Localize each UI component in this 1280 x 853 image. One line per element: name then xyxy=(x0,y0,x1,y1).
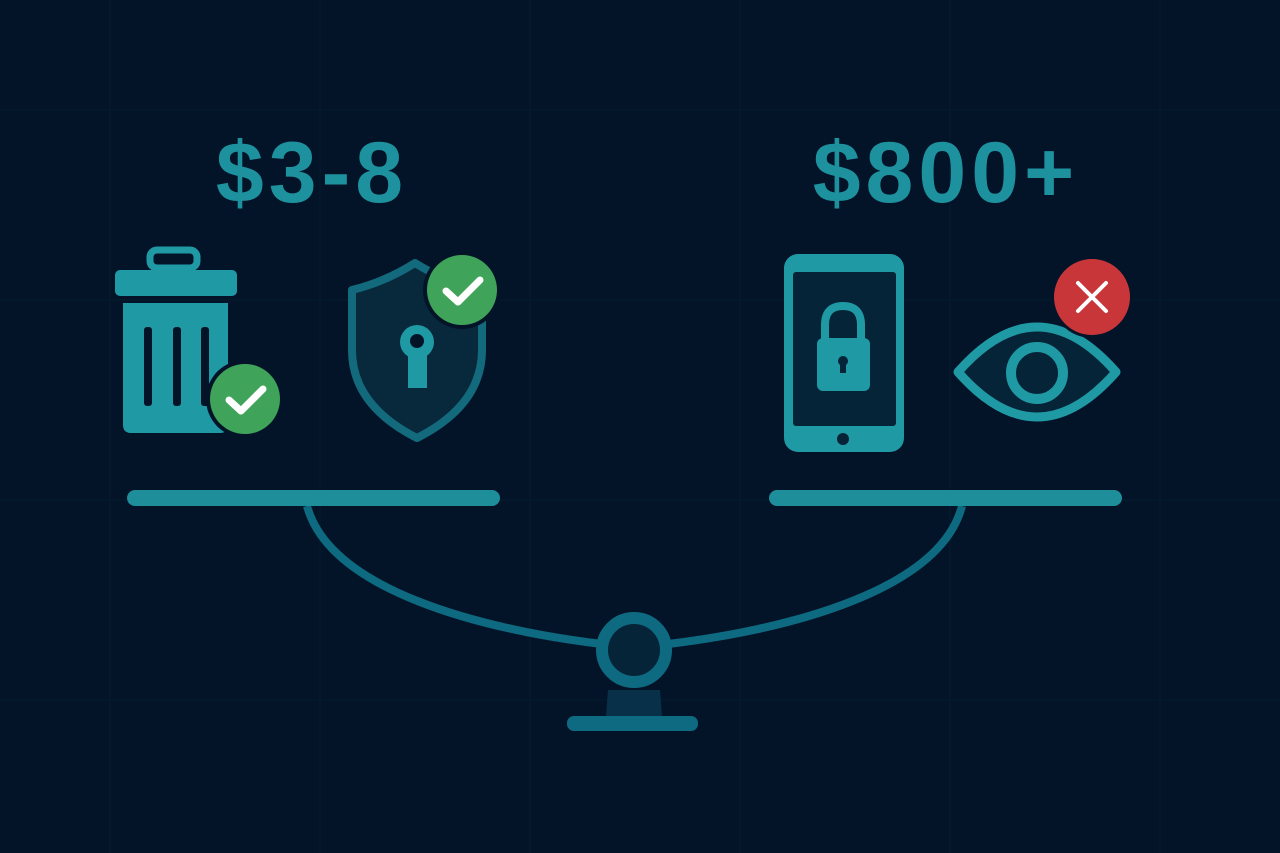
scale: pivot and stand xyxy=(567,618,698,731)
icon: shield with keyhole xyxy=(352,263,482,438)
icon: phone with lock xyxy=(784,254,904,452)
price: left: $3-8 xyxy=(216,125,408,221)
scale: left pan xyxy=(127,490,500,506)
icon: green check on shield xyxy=(423,251,501,329)
scale: beam arc xyxy=(307,506,962,645)
icon: trash can xyxy=(115,250,237,433)
icon: eye xyxy=(958,327,1116,417)
icon: red x xyxy=(1051,256,1133,338)
scale: right pan xyxy=(769,490,1122,506)
price: right: $800+ xyxy=(813,125,1079,221)
icon: green check on trash xyxy=(206,360,284,438)
